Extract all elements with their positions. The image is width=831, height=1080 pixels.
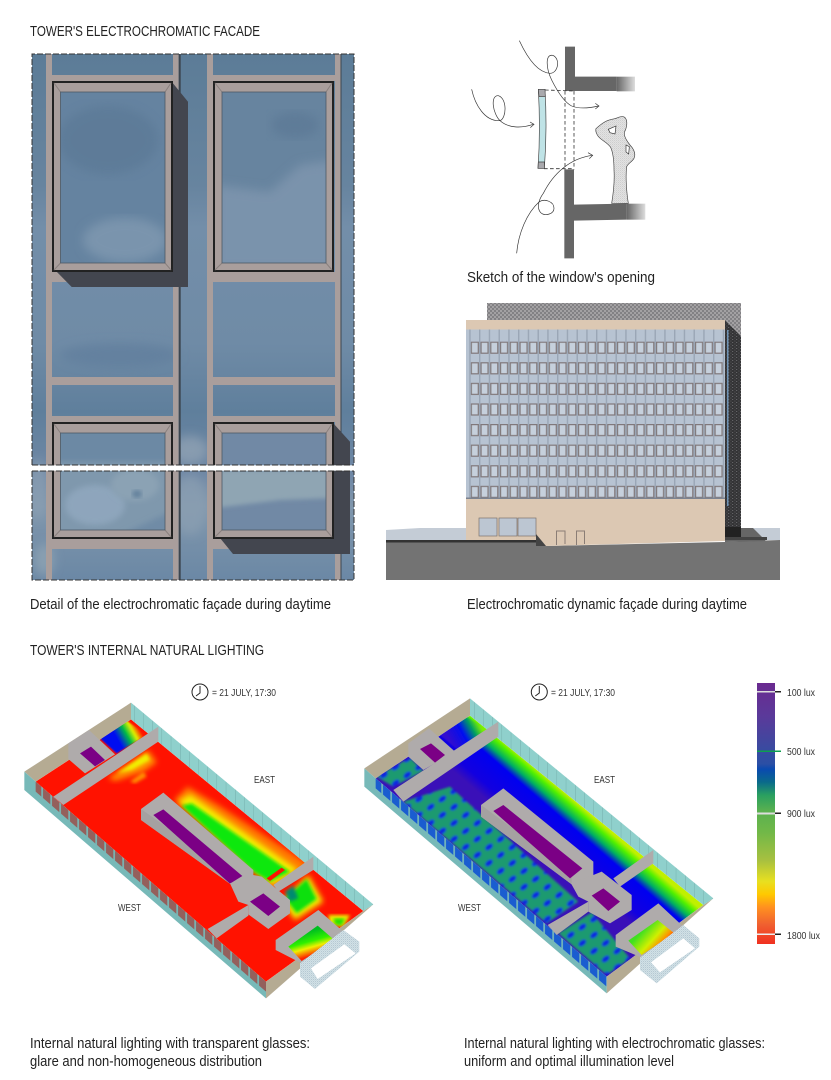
building elevation [386, 303, 780, 580]
base [466, 499, 725, 546]
shadow: lower right window [220, 423, 350, 554]
cornice [466, 320, 725, 330]
tan wall south [607, 898, 713, 993]
title: electrochromatic facade: TOWER'S ELECTROCHROMATIC FACADE [30, 24, 260, 40]
lattice [300, 930, 359, 989]
label: west: WEST [118, 902, 141, 914]
legend: lux scale: 900 lux [787, 808, 816, 820]
lattice [640, 925, 699, 983]
person [596, 117, 635, 203]
shop windows [479, 518, 536, 536]
corridors [393, 722, 653, 935]
caption: facade detail: Detail of the electrochromatic façade during daytime [30, 597, 331, 613]
glass panel [538, 89, 546, 168]
lower small core [571, 872, 632, 923]
caption line two: electrochromatic glass: uniform and optimal illumination level [464, 1054, 674, 1070]
break line [30, 465, 356, 471]
clock and date: right: = 21 JULY, 17:30 [551, 687, 615, 699]
rear textured volume [487, 303, 741, 336]
legend: lux scale [757, 683, 821, 944]
west glazing [24, 772, 266, 998]
legend: lux scale: 1800 lux [787, 930, 821, 942]
corridors [53, 727, 313, 938]
legend: lux scale: 500 lux [787, 746, 816, 758]
background sky strip [386, 528, 780, 542]
sketch: window opening [472, 41, 645, 258]
tan wall south [266, 904, 373, 998]
window grid [471, 342, 724, 498]
window: lower left [52, 422, 173, 539]
light ray curves [472, 41, 599, 253]
main core [141, 793, 253, 885]
cloud reflections [28, 343, 208, 576]
lower small core [230, 875, 290, 929]
label: east: EAST [594, 774, 615, 786]
clock and date: left: = 21 JULY, 17:30 [212, 687, 276, 699]
east glazing [131, 703, 373, 911]
clock and date: right [531, 684, 615, 700]
plan: transparent glass [24, 703, 373, 998]
upper wall [565, 47, 635, 91]
shadow: upper left window [57, 83, 188, 287]
tan wall [364, 698, 470, 778]
legend: lux scale: 100 lux [787, 687, 816, 699]
doors [556, 531, 584, 545]
stair ring [616, 903, 683, 958]
window: upper left [52, 81, 173, 272]
caption: building: Electrochromatic dynamic façade during daytime [467, 597, 747, 613]
ground [386, 528, 780, 580]
mullions [46, 54, 342, 580]
lower wall [564, 169, 645, 258]
window: lower right [213, 422, 335, 539]
caption: electrochromatic glass: Internal natural lighting with electrochromatic glasses: [464, 1036, 765, 1052]
tan walls [24, 703, 131, 782]
clock and date: left [192, 684, 276, 700]
label: west: WEST [458, 902, 481, 914]
glazed facade [466, 329, 725, 499]
caption: sketch: Sketch of the window's opening [467, 270, 655, 286]
dashed opening [544, 90, 575, 169]
ramp [536, 534, 546, 546]
illuminance floor [376, 716, 703, 977]
main core [481, 788, 593, 884]
upper small core [408, 728, 455, 770]
panel: facade detail [28, 54, 356, 580]
caption line two: transparent glass: glare and non-homogeneous distribution [30, 1054, 262, 1070]
caption: transparent glass: Internal natural lighting with transparent glasses: [30, 1036, 310, 1052]
upper small core [68, 730, 115, 773]
window: upper right [213, 81, 335, 272]
dark side wall [725, 320, 741, 536]
stair ring [276, 910, 343, 963]
dashed crop frame [32, 54, 354, 580]
title: natural lighting: TOWER'S INTERNAL NATURAL LIGHTING [30, 643, 264, 659]
illuminance floor [36, 719, 363, 982]
west glazing [364, 768, 607, 993]
east glazing [470, 698, 713, 905]
plan: electrochromatic glass [364, 698, 713, 993]
label: east: EAST [254, 774, 275, 786]
